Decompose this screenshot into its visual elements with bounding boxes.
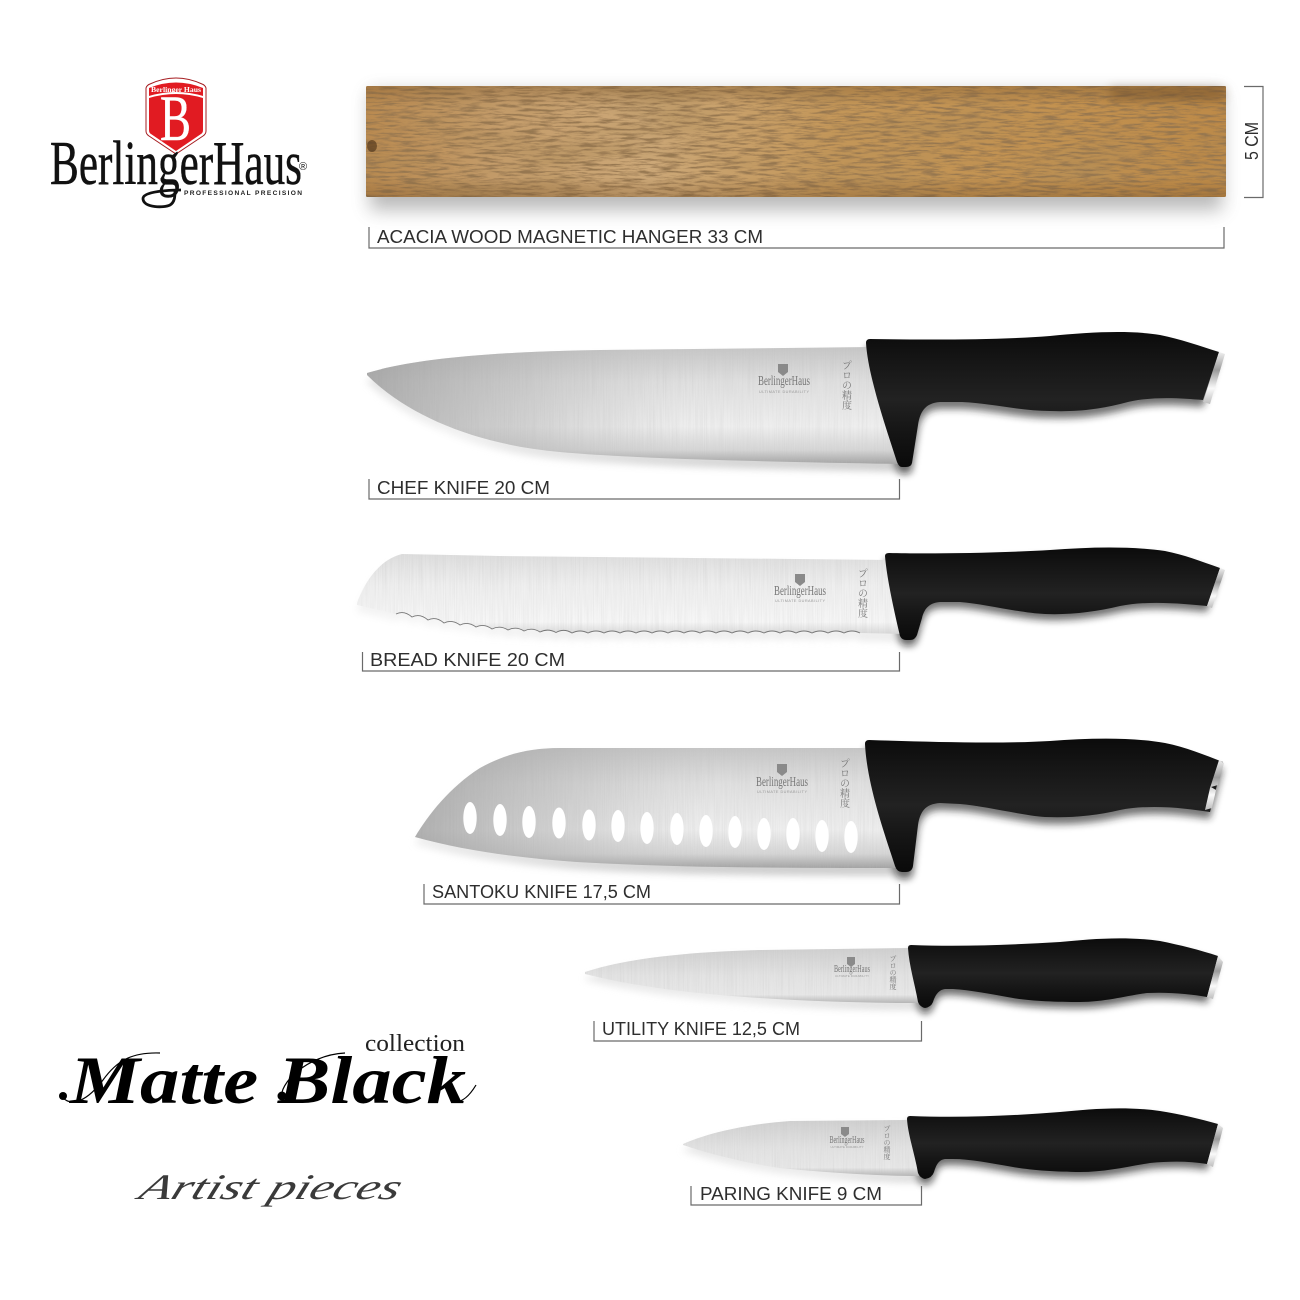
- dimension: 5 cm: 5 CM: [1242, 122, 1262, 160]
- blade mark: [758, 360, 852, 410]
- blade mark: BerlingerHaus: [758, 374, 810, 389]
- blade mark: BerlingerHaus: [834, 964, 870, 975]
- ferrule: [1203, 352, 1225, 404]
- knife: paring knife: [683, 1108, 1223, 1185]
- logo: Berlinger Haus: [50, 78, 307, 207]
- ferrule: [1207, 568, 1225, 608]
- blade mark: プロの精度: [838, 758, 850, 808]
- blade mark: BerlingerHaus: [830, 1135, 865, 1146]
- wordmark: BerlingerHaus: [50, 130, 302, 198]
- blade mark: ULTIMATE DURABILITY: [757, 790, 807, 794]
- script title: Matte Black: [69, 1042, 466, 1118]
- ferrule: [1207, 1124, 1223, 1167]
- blade: [683, 1120, 920, 1176]
- handle: [908, 938, 1218, 1008]
- registered mark: ®: [299, 161, 307, 173]
- blade mark: ULTIMATE DURABILITY: [775, 599, 825, 603]
- serration edge: [396, 613, 860, 633]
- blade: [585, 948, 919, 1003]
- knife: bread knife: [357, 548, 1225, 646]
- label: santoku knife: [424, 882, 900, 904]
- ferrule: [1205, 760, 1224, 810]
- icon: red shield: B: [160, 83, 191, 155]
- blade mark: ULTIMATE DURABILITY: [830, 1145, 864, 1149]
- blade: [415, 748, 897, 868]
- blade mark: [774, 568, 868, 618]
- dimension: 5 cm: [1242, 86, 1263, 198]
- tagline: Artist pieces: Artist pieces: [130, 1168, 408, 1208]
- knife: chef knife: [367, 332, 1225, 474]
- blade mark: ULTIMATE DURABILITY: [835, 974, 869, 978]
- label: chef knife: [369, 478, 900, 499]
- blade mark: プロの精度: [883, 1125, 891, 1161]
- handle: [865, 739, 1223, 872]
- label: santoku knife: SANTOKU KNIFE 17,5 CM: [432, 882, 651, 902]
- label: chef knife: CHEF KNIFE 20 CM: [377, 478, 550, 498]
- handle: [866, 332, 1219, 467]
- label: paring knife: PARING KNIFE 9 CM: [700, 1184, 882, 1204]
- title swashes: [59, 1053, 476, 1102]
- label: bread knife: BREAD KNIFE 20 CM: [370, 650, 565, 670]
- knife: santoku knife: [415, 739, 1224, 879]
- blade mark: プロの精度: [889, 955, 897, 991]
- panel: acacia wood magnetic hanger: [366, 86, 1226, 210]
- blade mark: プロの精度: [840, 360, 852, 410]
- handle: [907, 1108, 1218, 1179]
- blade mark: プロの精度: [856, 568, 868, 618]
- label: acacia wood magnetic hanger: [369, 227, 1224, 248]
- blade holes: [463, 802, 858, 853]
- title: Matte Black collection: [59, 1031, 476, 1118]
- label: utility knife: [594, 1019, 922, 1041]
- blade mark: [756, 758, 850, 808]
- knife: utility knife: [585, 938, 1223, 1014]
- blade mark: BerlingerHaus: [756, 775, 808, 790]
- blade mark: [830, 1125, 891, 1161]
- collection text: collection: [365, 1031, 465, 1057]
- ferrule: [1207, 956, 1223, 999]
- blade: [357, 554, 905, 634]
- handle: [885, 548, 1220, 640]
- label: acacia wood magnetic hanger: ACACIA WOOD MAGNETIC HANGER 33 CM: [377, 227, 763, 247]
- blade: [367, 347, 900, 464]
- tagline: PROFESSIONAL PRECISION: [184, 190, 302, 197]
- blade mark: BerlingerHaus: [774, 584, 826, 599]
- wood board: [366, 86, 1226, 197]
- icon: red shield: Berlinger Haus: [151, 85, 201, 94]
- label: utility knife: UTILITY KNIFE 12,5 CM: [602, 1019, 800, 1039]
- icon: red shield: [146, 78, 206, 155]
- blade mark: [834, 955, 897, 991]
- blade mark: ULTIMATE DURABILITY: [759, 390, 809, 394]
- g descender flourish: [143, 190, 181, 207]
- label: bread knife: [362, 650, 900, 671]
